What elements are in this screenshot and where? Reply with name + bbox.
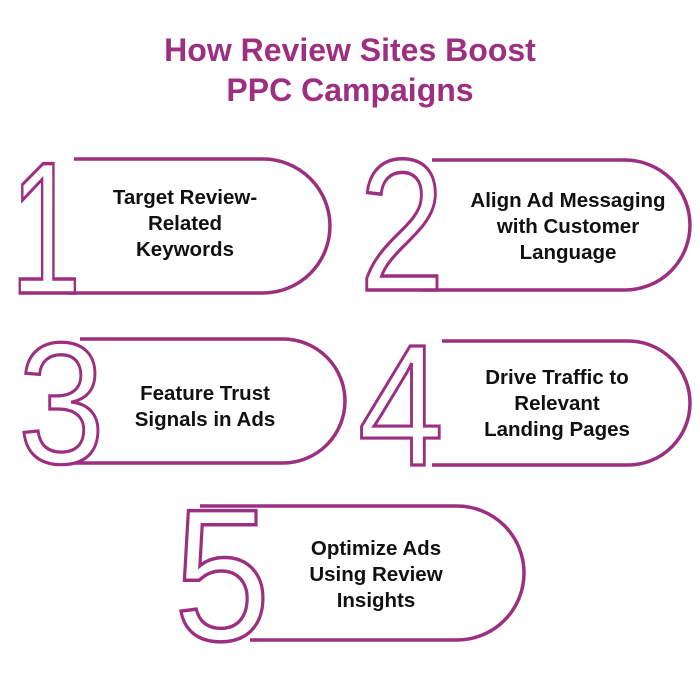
title: PPC Campaigns — [226, 72, 474, 108]
text 2 — [470, 189, 666, 264]
panel: step 5 — [174, 470, 524, 681]
text 3: Feature Trust — [140, 382, 270, 405]
text 3: Signals in Ads — [135, 408, 275, 431]
text 1: Related — [148, 212, 222, 235]
panel: step 2 — [359, 120, 690, 330]
text 5: Insights — [337, 589, 415, 612]
text 2: Language — [520, 241, 616, 264]
panel: step 4 — [358, 309, 690, 502]
text 4: Drive Traffic to — [485, 366, 629, 389]
text 4: Relevant — [514, 392, 600, 415]
title — [164, 32, 536, 108]
text 5: Using Review — [309, 563, 443, 586]
numeral 5: 5 — [174, 470, 270, 681]
text 1: Target Review- — [113, 186, 257, 209]
title: How Review Sites Boost — [164, 32, 536, 68]
text 4 — [484, 366, 630, 441]
text 5: Optimize Ads — [311, 537, 441, 560]
text 3 — [135, 382, 275, 431]
numeral 3: 3 — [18, 307, 105, 500]
text 5 — [309, 537, 443, 612]
numeral 2: 2 — [359, 120, 445, 330]
numeral 1: 1 — [10, 123, 81, 334]
text 2: with Customer — [496, 215, 639, 238]
text 1 — [113, 186, 257, 261]
text 1: Keywords — [136, 238, 234, 261]
text 4: Landing Pages — [484, 418, 630, 441]
panel: step 1 — [10, 123, 330, 334]
text 2: Align Ad Messaging — [470, 189, 666, 212]
panel: step 3 — [18, 307, 345, 500]
numeral 4: 4 — [358, 309, 444, 502]
